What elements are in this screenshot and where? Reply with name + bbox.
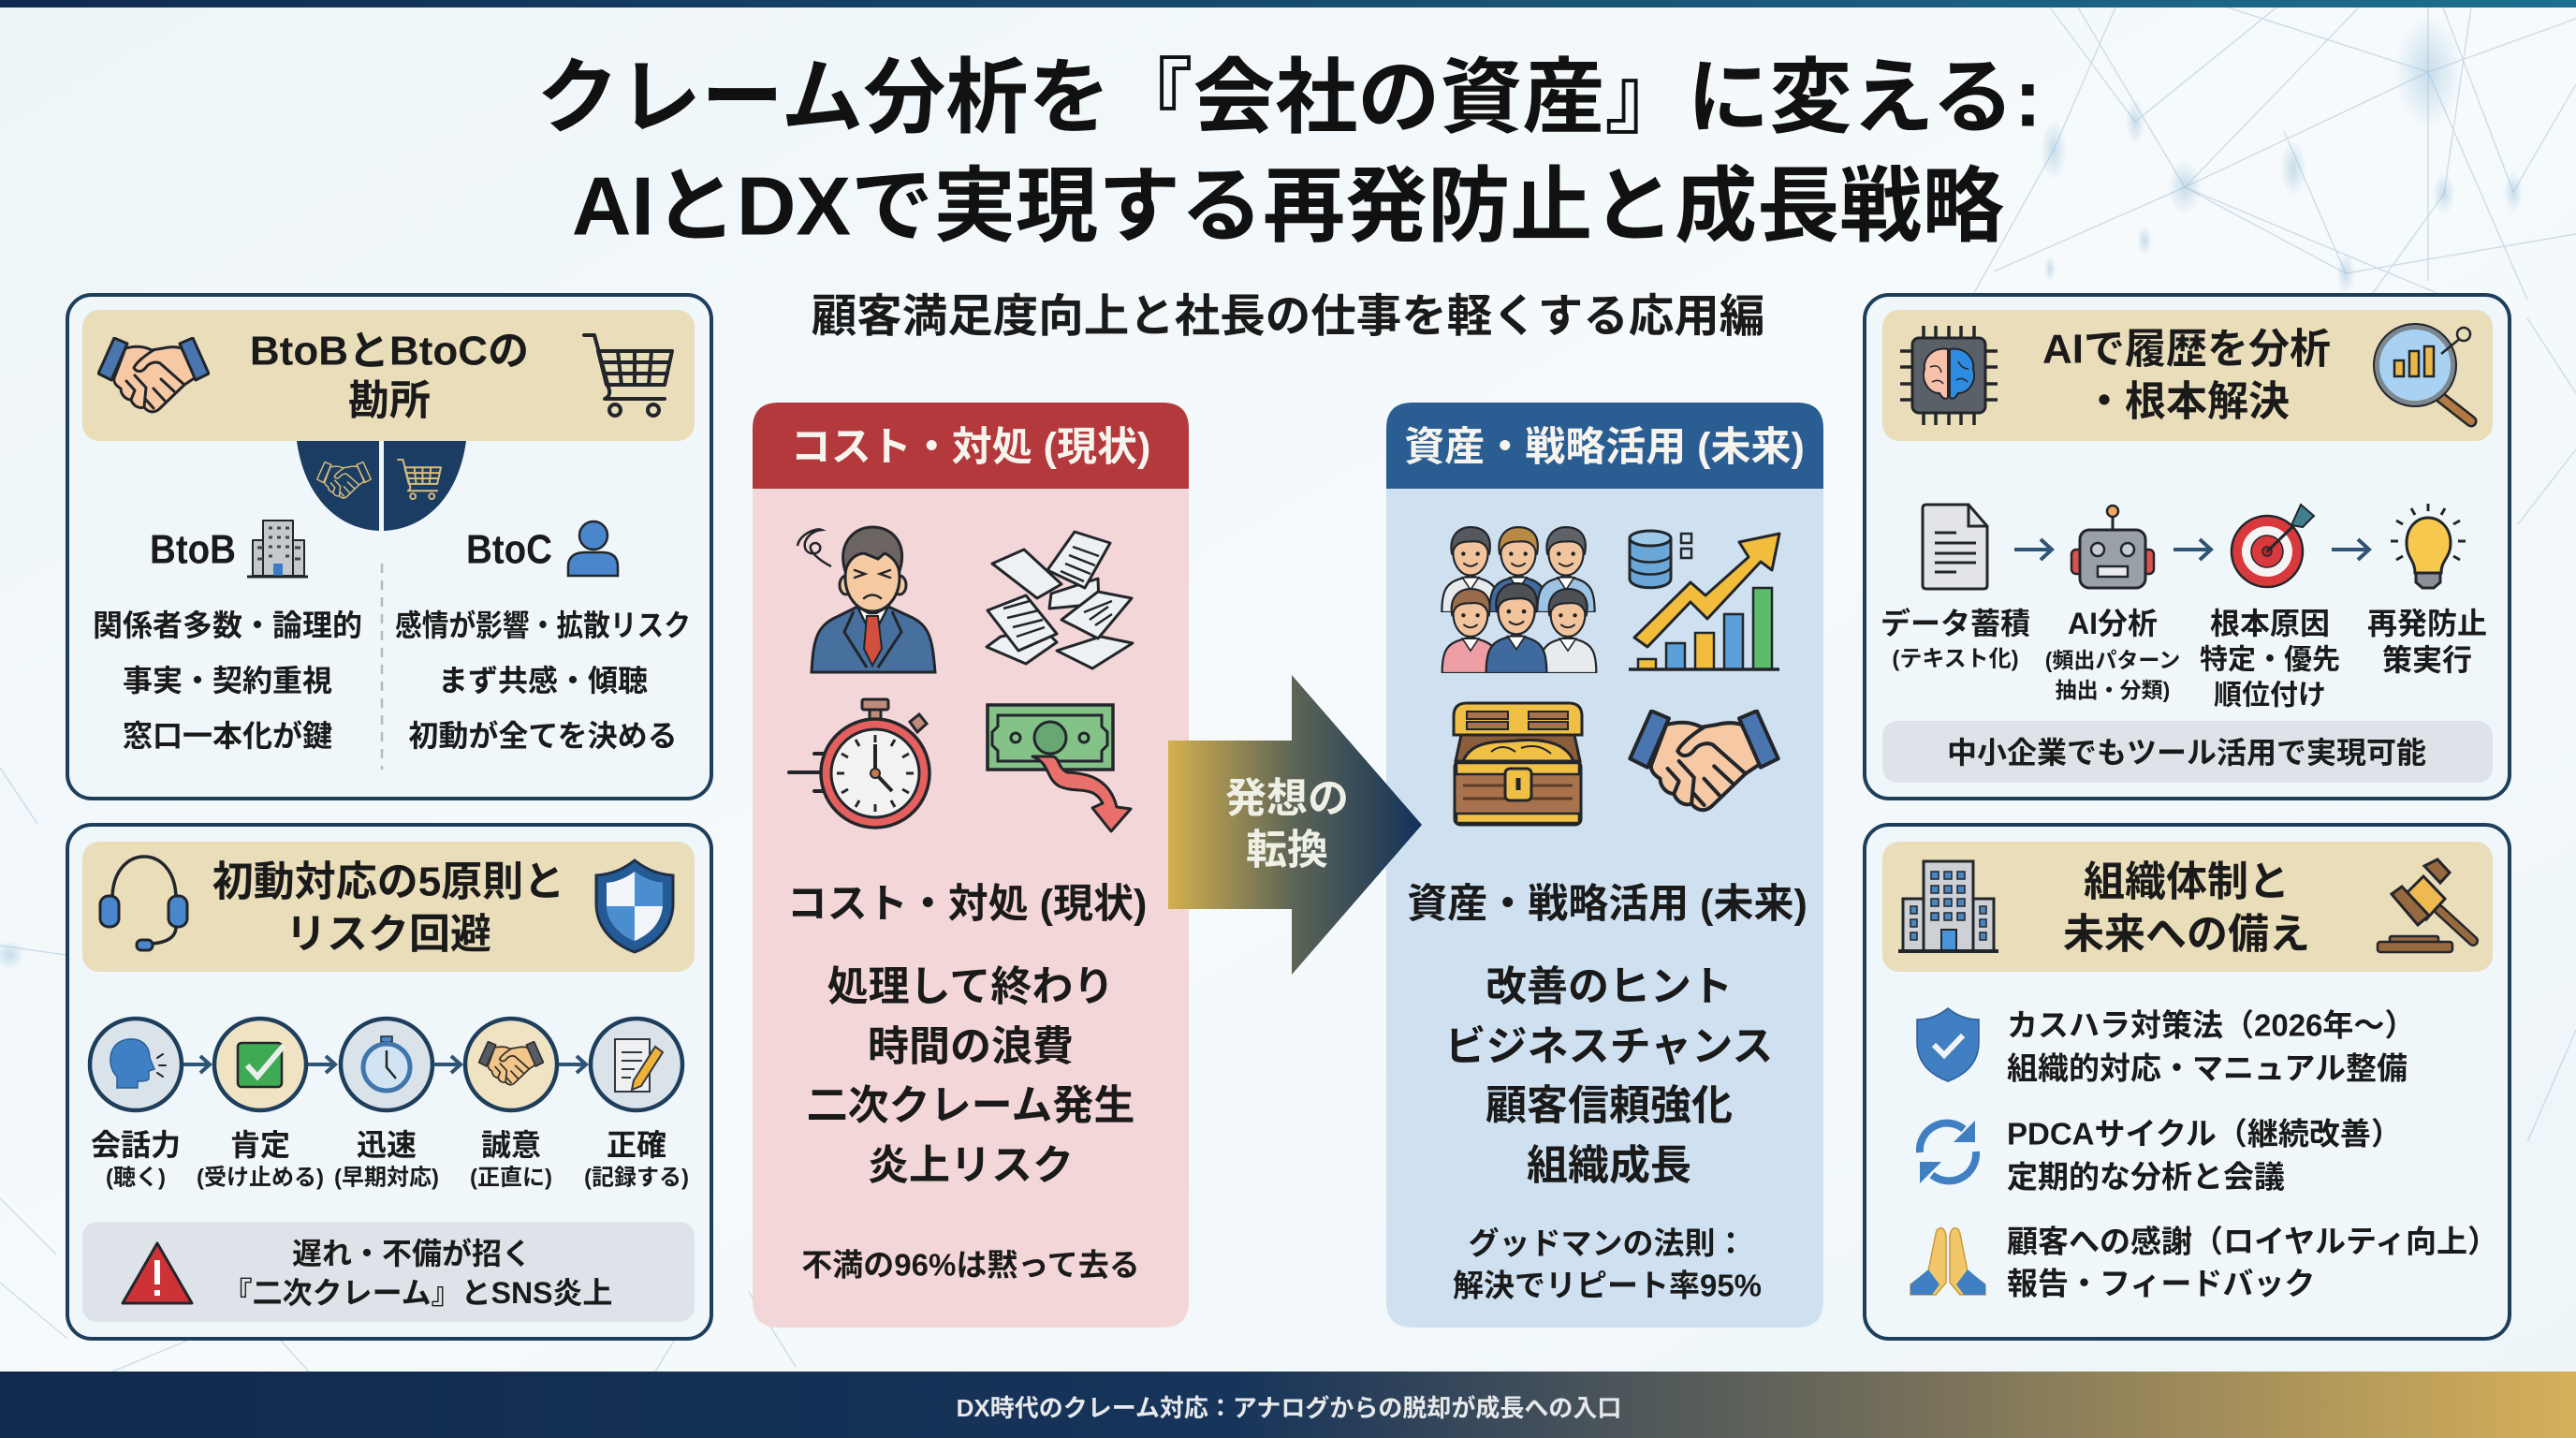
panel heading: 組織体制と [2084, 859, 2290, 904]
arrow [559, 1056, 586, 1073]
future state list: 組織成長 [1527, 1142, 1691, 1189]
panel: organization and future readiness [1865, 825, 2510, 1339]
arrow: shift in thinking: 発想の [1225, 775, 1349, 822]
BtoB label: BtoB [150, 526, 236, 573]
panel header: コスト・対処 (現状) [791, 425, 1150, 470]
step 3: speed [334, 1019, 439, 1191]
step 3: speed: (早期対応) [334, 1165, 439, 1191]
future state list: 改善のヒント [1486, 964, 1733, 1009]
panel heading: BtoBとBtoCの [250, 328, 529, 374]
BtoC label: BtoC [466, 526, 552, 573]
current state list [807, 964, 1134, 1189]
future state list [1445, 964, 1773, 1189]
footer bar: DX時代のクレーム対応：アナログからの脱却が成長への入口 [957, 1394, 1621, 1422]
step 5: accuracy [584, 1019, 689, 1191]
future state list: ビジネスチャンス [1445, 1024, 1773, 1069]
icon: headset [100, 857, 187, 950]
step 1: listen [90, 1019, 182, 1191]
icon: security shield [596, 860, 673, 952]
title [536, 51, 2042, 253]
step: root cause: 順位付け [2214, 680, 2326, 712]
step: data: データ蓄積 [1881, 607, 2030, 640]
current state list: 炎上リスク [868, 1142, 1074, 1189]
step 5: accuracy: (記録する) [584, 1165, 689, 1191]
icon: company building [1898, 861, 1998, 951]
step 5: accuracy: 正確 [607, 1128, 666, 1162]
icon: AI brain chip [1900, 326, 1998, 425]
future state list: 顧客信頼強化 [1486, 1082, 1733, 1129]
panel heading: 未来への備え [2063, 912, 2310, 957]
step flow [90, 1019, 689, 1191]
icon: person [568, 521, 618, 576]
panel heading [1882, 310, 2493, 441]
panel heading [1882, 842, 2493, 972]
icon: gavel [2378, 859, 2473, 952]
warning callout: 遅れ・不備が招く [292, 1237, 532, 1270]
BtoB points: 関係者多数・論理的 [93, 609, 362, 642]
icon: magnifier chart [2374, 324, 2471, 421]
callout: achievable for SMEs [1882, 721, 2493, 783]
arrow: shift in thinking: 転換 [1246, 828, 1328, 873]
BtoB points: 窓口一本化が鍵 [123, 719, 332, 753]
panel: first response 5 principles [67, 825, 711, 1339]
item: customer harassment law: 組織的対応・マニュアル整備 [2007, 1050, 2408, 1086]
icon: scattered papers [987, 532, 1133, 668]
step 4: sincerity [465, 1019, 557, 1191]
statistic note [1453, 1226, 1762, 1303]
step: data: (テキスト化) [1892, 646, 2019, 672]
panel heading: ・根本解決 [2084, 378, 2290, 425]
step 1: listen: (聴く) [106, 1165, 166, 1191]
icon: money loss [988, 705, 1131, 831]
current state list: 時間の浪費 [868, 1024, 1074, 1069]
top bar [0, 0, 2576, 7]
step 1: listen: 会話力 [91, 1128, 181, 1162]
statistic note: 解決でリピート率95% [1453, 1268, 1762, 1303]
callout: achievable for SMEs: 中小企業でもツール活用で実現可能 [1947, 736, 2426, 770]
BtoC points: まず共感・傾聴 [438, 664, 648, 697]
panel: BtoB and BtoC [67, 295, 711, 799]
icon: office building [247, 521, 308, 577]
step: prevention: 再発防止 [2367, 607, 2487, 640]
icon: handshake [98, 338, 209, 412]
arrow [2332, 539, 2369, 560]
AI flow [1881, 504, 2487, 712]
warning callout [82, 1222, 695, 1322]
icon: worried businessman [798, 527, 935, 672]
item: customer harassment law [1917, 1007, 2415, 1086]
arrow [433, 1056, 461, 1073]
statistic note: グッドマンの法則： [1468, 1226, 1747, 1260]
subtitle: 顧客満足度向上と社長の仕事を軽くする応用編 [812, 291, 1764, 342]
panel: asset / future [1386, 403, 1823, 1328]
panel heading: 勘所 [348, 378, 431, 423]
icon: stopwatch [789, 699, 929, 828]
item: thanks to customers [1910, 1225, 2498, 1301]
step: data [1881, 505, 2030, 672]
step 4: sincerity: (正直に) [470, 1165, 552, 1191]
half circle badge [297, 441, 466, 531]
BtoB points [93, 609, 362, 753]
footer bar [0, 1372, 2576, 1438]
step 3: speed: 迅速 [357, 1128, 417, 1162]
warning callout: 『二次クレーム』とSNS炎上 [223, 1276, 612, 1310]
icon: handshake [1630, 711, 1778, 810]
icon: team of people [1442, 527, 1596, 673]
arrow [183, 1056, 210, 1073]
item: PDCA cycle [1920, 1116, 2402, 1195]
arrow: shift in thinking [1168, 675, 1422, 975]
BtoC points: 初動が全てを決める [408, 719, 678, 753]
panel heading: リスク回避 [285, 912, 491, 957]
panel heading: 初動対応の5原則と [212, 859, 564, 904]
BtoC points: 感情が影響・拡散リスク [395, 609, 691, 642]
step 2: affirm [197, 1019, 324, 1191]
subheading: コスト・対処 (現状) [787, 882, 1147, 927]
step: root cause: 根本原因 [2210, 607, 2330, 640]
step 4: sincerity: 誠意 [481, 1128, 541, 1162]
step: prevention: 策実行 [2382, 643, 2472, 677]
title: AIとDXで実現する再発防止と成長戦略 [572, 159, 2004, 253]
step: AI analysis: (頻出パターン [2045, 648, 2180, 672]
statistic note: 不満の96%は黙って去る [801, 1247, 1140, 1283]
item: PDCA cycle: PDCAサイクル（継続改善） [2007, 1116, 2402, 1152]
arrow [308, 1056, 335, 1073]
icon: treasure chest [1454, 703, 1582, 825]
panel heading: AIで履歴を分析 [2042, 326, 2331, 373]
panel: AI analysis [1865, 295, 2510, 799]
BtoC points [395, 609, 691, 753]
step 2: affirm: 肯定 [230, 1128, 290, 1162]
panel: cost / current [753, 403, 1189, 1328]
icon: shopping cart [584, 335, 672, 416]
panel header: 資産・戦略活用 (未来) [1404, 425, 1805, 470]
step: root cause [2200, 505, 2340, 712]
panel heading [82, 842, 695, 972]
item: thanks to customers: 顧客への感謝（ロイヤルティ向上） [2007, 1225, 2498, 1258]
current state list: 二次クレーム発生 [807, 1082, 1134, 1129]
arrow [2014, 539, 2052, 560]
step: AI analysis [2045, 506, 2180, 702]
step: root cause: 特定・優先 [2200, 644, 2340, 676]
step: AI analysis: AI分析 [2068, 607, 2158, 640]
step 2: affirm: (受け止める) [197, 1165, 324, 1191]
item: customer harassment law: カスハラ対策法（2026年〜） [2007, 1007, 2415, 1043]
current state list: 処理して終わり [827, 964, 1114, 1009]
icon: data and growth chart [1629, 531, 1779, 669]
step: prevention [2367, 504, 2487, 677]
BtoB points: 事実・契約重視 [123, 664, 332, 697]
title: クレーム分析を『会社の資産』に変える: [536, 51, 2042, 144]
panel heading [82, 310, 695, 441]
item: thanks to customers: 報告・フィードバック [2007, 1266, 2315, 1301]
subheading: 資産・戦略活用 (未来) [1407, 882, 1808, 927]
step: AI analysis: 抽出・分類) [2056, 678, 2170, 702]
arrow [2174, 539, 2211, 560]
item: PDCA cycle: 定期的な分析と会議 [2007, 1159, 2285, 1195]
